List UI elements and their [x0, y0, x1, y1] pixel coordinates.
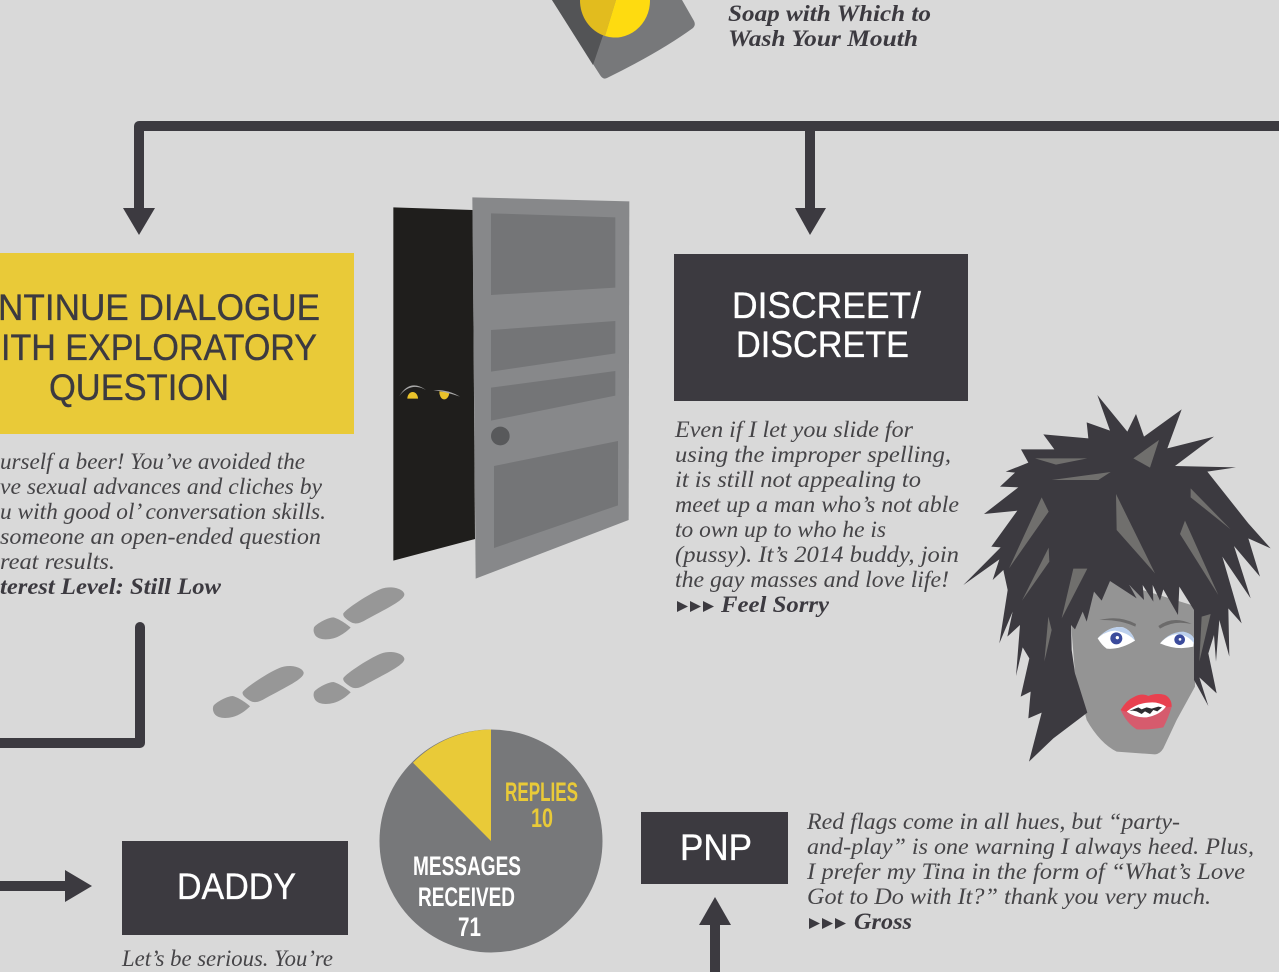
panel: discreet heading: DISCRETE [736, 324, 909, 365]
icon: woman with spiky hair [963, 395, 1271, 762]
text block: pnp: and-play” is one warning I always heed. Plus, [807, 834, 1254, 860]
text block: discreet: to own up to who he is [675, 517, 886, 543]
face [1071, 580, 1197, 754]
panel: daddy heading [122, 841, 348, 935]
panel: continue dialogue heading: NTINUE DIALOGUE [0, 287, 320, 328]
text block: discreet: Even if I let you slide for [674, 417, 914, 443]
pie chart: replies vs messages received: 10 [531, 803, 553, 833]
eyes and brows [1098, 618, 1194, 649]
text block: daddy: Let’s be serious. You’re [121, 946, 333, 972]
panel: continue dialogue heading [0, 253, 354, 434]
text block: continue dialogue: u with good ol’ conversation skills. [0, 499, 326, 525]
text block: discreet: using the improper spelling, [675, 442, 951, 468]
arrow: up to pnp [699, 897, 731, 972]
arrow: connector to continue dialogue [123, 126, 1279, 235]
text block: pnp [806, 809, 1254, 935]
arrow: elbow line [0, 627, 140, 743]
text block: pnp: Gross [854, 909, 912, 935]
panel: continue dialogue heading: ITH EXPLORATORY [1, 327, 317, 368]
panel: pnp heading: PNP [680, 827, 752, 868]
text block: pnp: Got to Do with It?” thank you very much. [807, 884, 1211, 910]
text block: continue dialogue: reat results. [0, 549, 115, 575]
text block: discreet: it is still not appealing to [675, 467, 921, 493]
soap caption: Soap with Which to [728, 1, 931, 27]
hair [963, 395, 1271, 762]
text block: continue dialogue: someone an open-ended question [0, 524, 321, 550]
text block: pnp: I prefer my Tina in the form of “What’s Love [806, 859, 1245, 885]
text block: discreet: the gay masses and love life! [675, 567, 949, 593]
icon: open door [393, 197, 629, 579]
text block: continue dialogue: urself a beer! You’ve avoided the [0, 449, 305, 475]
pie chart: replies vs messages received: REPLIES [505, 777, 578, 807]
icon: eyes in the dark [399, 385, 460, 399]
arrow: connector to discreet [795, 126, 826, 235]
panel: pnp heading [641, 812, 788, 884]
text block: continue dialogue [0, 449, 326, 600]
text block: discreet [674, 417, 959, 618]
text block: discreet: Feel Sorry [720, 592, 830, 618]
panel: discreet heading [674, 254, 968, 401]
panel: daddy heading: DADDY [177, 866, 296, 907]
icon: footprints [213, 587, 404, 718]
text block: continue dialogue: terest Level: Still Low [0, 574, 221, 600]
hair highlights [1009, 440, 1231, 662]
arrow: to daddy [0, 870, 92, 902]
icon: soap bar [552, 0, 695, 79]
pie chart: replies vs messages received [380, 730, 602, 952]
soap caption [728, 1, 931, 52]
panel: continue dialogue heading: QUESTION [49, 367, 229, 408]
pie chart: replies vs messages received: 71 [458, 912, 481, 942]
pie chart: replies vs messages received: MESSAGES [413, 851, 521, 881]
text block: discreet: meet up a man who’s not able [675, 492, 959, 518]
panel: discreet heading: DISCREET/ [732, 285, 922, 326]
mouth [1121, 694, 1172, 729]
soap caption: Wash Your Mouth [728, 26, 918, 52]
pie chart: replies vs messages received: RECEIVED [418, 882, 515, 912]
text block: pnp: Red flags come in all hues, but “party- [806, 809, 1180, 835]
text block: discreet: (pussy). It’s 2014 buddy, join [675, 542, 959, 568]
text block: continue dialogue: ve sexual advances and cliches by [0, 474, 323, 500]
